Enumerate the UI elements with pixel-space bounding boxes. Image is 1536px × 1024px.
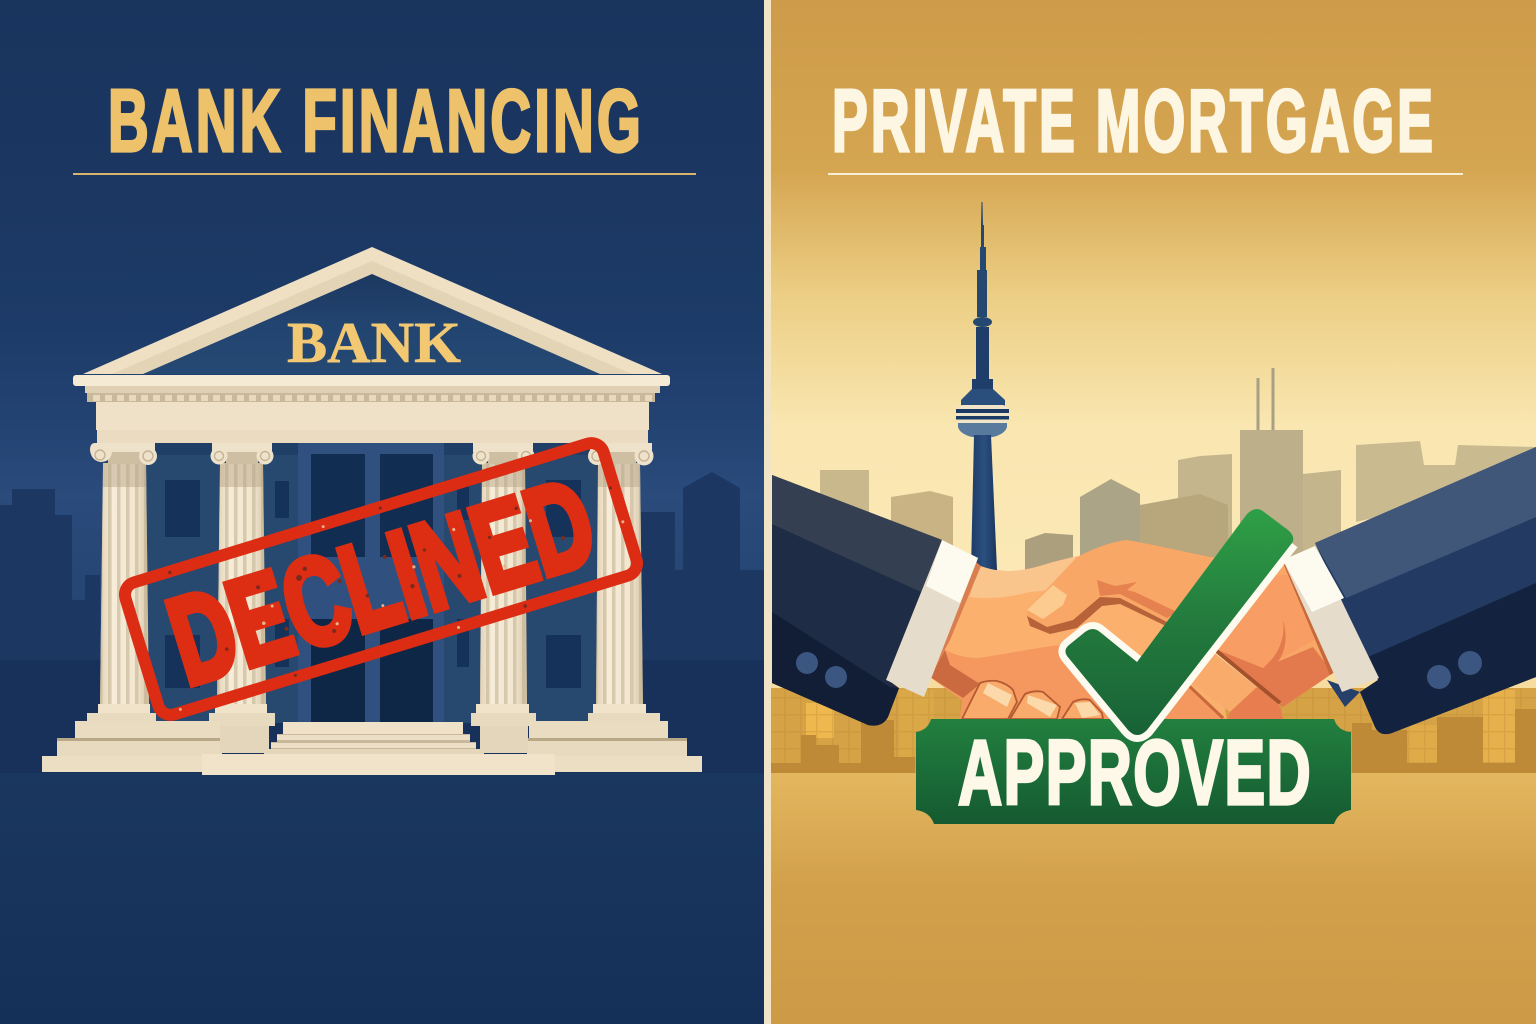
wrapped finger — [1187, 652, 1257, 712]
right hand — [1027, 540, 1333, 707]
panel: bank financing — [0, 0, 764, 1024]
background band: dark lower city — [0, 660, 764, 775]
lower fingers — [962, 681, 1103, 719]
left hand pale top — [970, 556, 1077, 598]
column 3 — [471, 443, 536, 726]
left hand dark edge — [930, 650, 980, 698]
stamp border — [122, 440, 640, 718]
banner shape — [916, 719, 1351, 824]
heading: bank financing: BANK FINANCING — [108, 71, 644, 170]
panel ground — [771, 773, 1536, 1024]
frieze — [85, 386, 660, 393]
stamp wear highlights — [140, 441, 640, 714]
column 2 — [209, 443, 275, 726]
left hand — [930, 556, 1227, 720]
wall top shadow — [140, 443, 606, 455]
dentil band — [87, 393, 655, 402]
thumb nail — [1027, 585, 1067, 619]
panel ground — [0, 773, 764, 1024]
left cuff — [886, 540, 978, 697]
left sleeve — [772, 475, 942, 726]
banner: approved — [916, 719, 1351, 824]
right sleeve — [1315, 447, 1536, 734]
banner text: APPROVED — [958, 722, 1312, 824]
bank wall — [140, 443, 606, 723]
entablature — [96, 402, 649, 430]
stamp text: DECLINED — [154, 453, 610, 711]
panel: private mortgage — [771, 0, 1536, 1024]
right palm fold — [1213, 647, 1333, 707]
palm crease — [1264, 620, 1286, 667]
illustration: handshake — [772, 447, 1536, 734]
left hand lower shade — [930, 645, 1227, 720]
stamp: declined — [122, 439, 641, 721]
right cuff — [1283, 546, 1379, 692]
heading underline — [828, 173, 1463, 175]
background skyline: dark city silhouette — [0, 472, 764, 660]
wrapped finger line — [1187, 684, 1223, 718]
landmark: cn tower — [956, 202, 1009, 570]
stamp wear speckles — [168, 440, 638, 705]
panel background: gold sky — [771, 0, 1536, 775]
background skyline — [820, 368, 1536, 570]
tympanum — [143, 274, 600, 374]
pediment inner band — [112, 261, 632, 374]
cornice — [73, 375, 670, 386]
cuff edge strip — [1283, 561, 1335, 675]
column 4 — [588, 443, 660, 722]
bank door frame — [298, 443, 444, 723]
knuckle dark line — [1213, 648, 1280, 703]
pediment — [83, 247, 662, 374]
bank doors — [311, 454, 433, 722]
architrave — [97, 430, 648, 443]
left hand cuff edge — [930, 562, 981, 677]
bank steps — [42, 721, 702, 775]
wrapped finger tip — [1227, 687, 1283, 719]
finger fold — [1097, 580, 1177, 618]
divider — [764, 0, 771, 1024]
right hand palm tone — [1180, 575, 1315, 668]
column 1 — [87, 443, 157, 722]
bank sign: BANK — [287, 310, 461, 375]
heading underline — [73, 173, 696, 175]
icon: check mark — [1065, 509, 1293, 735]
illustration: bank building — [42, 247, 702, 775]
foreground skyline — [771, 688, 1536, 773]
thumb shadow — [1027, 597, 1170, 634]
bank windows — [165, 480, 581, 688]
panel background: navy — [0, 0, 764, 775]
